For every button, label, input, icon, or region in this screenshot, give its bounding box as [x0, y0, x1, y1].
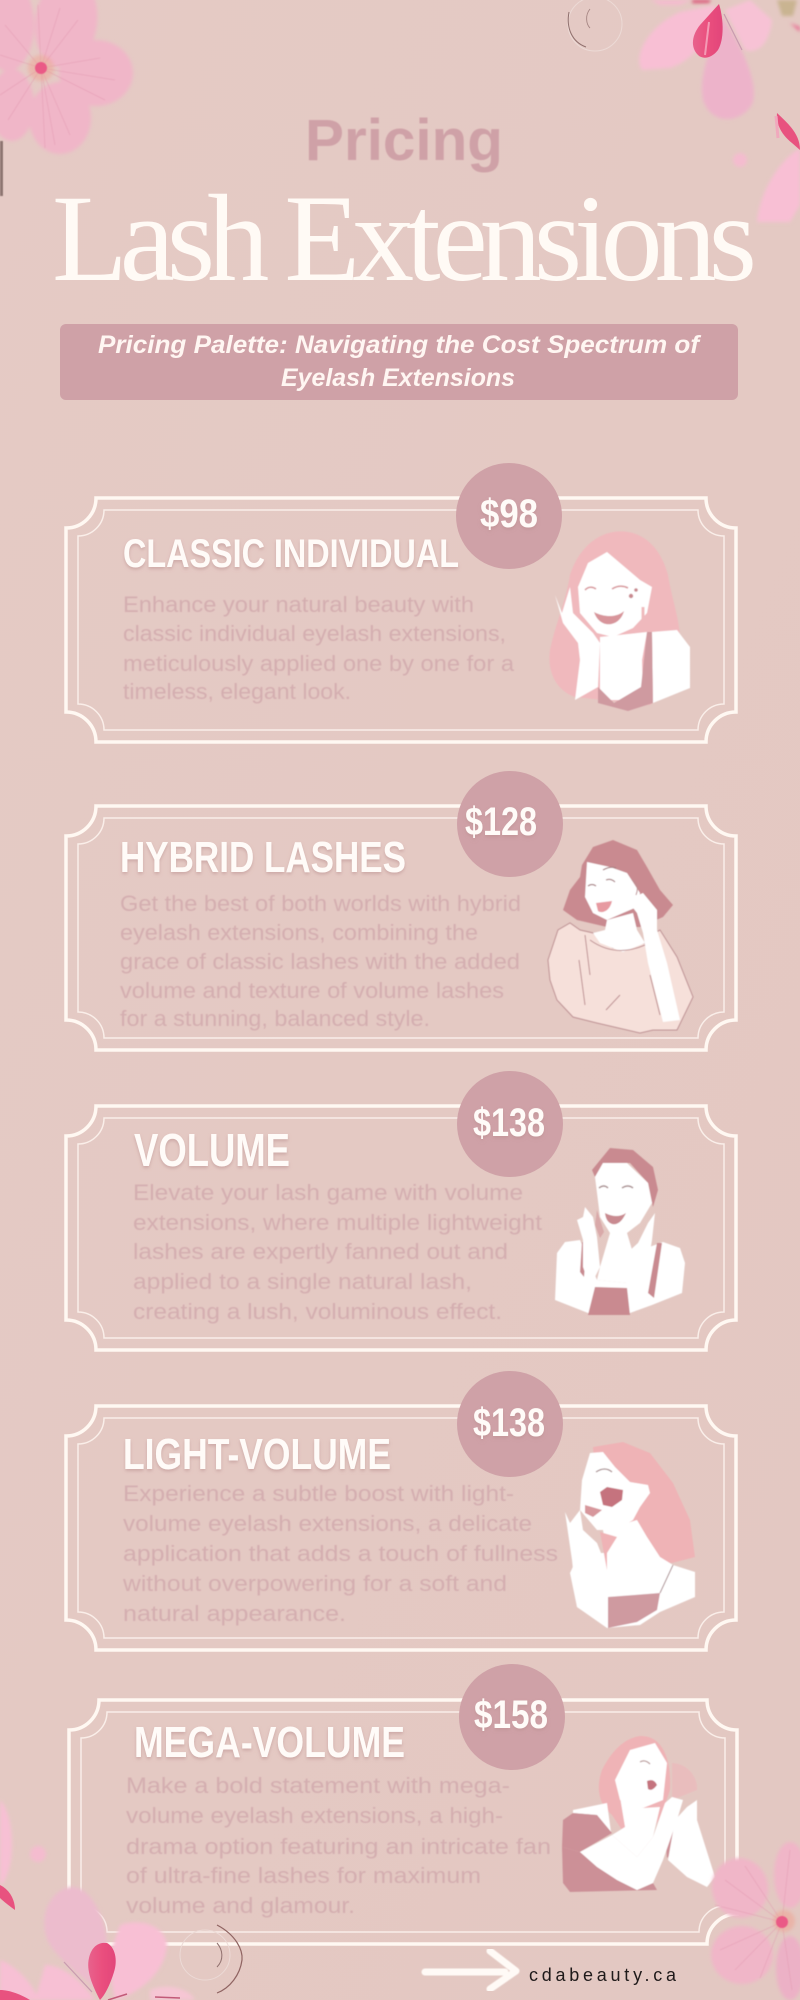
title: Lash Extensions: Lash Extensions: [52, 170, 757, 307]
panel: classic individual: [66, 463, 736, 742]
description: creating a lush, voluminous effect.: [133, 1299, 502, 1324]
price badge: [457, 771, 563, 877]
price badge: $98: [480, 492, 538, 536]
decorative sliver at left edge: [0, 141, 3, 196]
description: drama option featuring an intricate fan: [126, 1834, 551, 1859]
description: application that adds a touch of fullness: [123, 1541, 558, 1566]
banner text: Eyelash Extensions: [281, 364, 515, 392]
heading: HYBRID LASHES: [120, 833, 406, 882]
website link: cdabeauty.ca: [529, 1965, 677, 1985]
description: volume eyelash extensions, a high-: [126, 1803, 503, 1828]
description: of ultra-fine lashes for maximum: [126, 1863, 481, 1888]
heading: LIGHT-VOLUME: [123, 1430, 391, 1479]
card frame: [66, 806, 736, 1050]
panel: hybrid lashes: [66, 771, 736, 1050]
icon: woman touching face portrait: [555, 1148, 685, 1315]
description: grace of classic lashes with the added: [120, 949, 520, 974]
price badge: [457, 1071, 563, 1177]
description: timeless, elegant look.: [123, 679, 351, 704]
heading: CLASSIC INDIVIDUAL: [123, 532, 459, 576]
description: applied to a single natural lash,: [133, 1269, 472, 1294]
description: lashes are expertly fanned out and: [133, 1239, 508, 1264]
panel: volume: [66, 1071, 736, 1350]
icon: woman in blouse portrait: [548, 840, 693, 1033]
description: Get the best of both worlds with hybrid: [120, 891, 521, 916]
description: natural appearance.: [123, 1601, 346, 1626]
description: eyelash extensions, combining the: [120, 920, 478, 945]
price badge: [456, 463, 562, 569]
description: volume eyelash extensions, a delicate: [123, 1511, 532, 1536]
card frame: [66, 1106, 736, 1350]
card frame: [69, 1700, 737, 1944]
price badge: [459, 1664, 565, 1770]
price badge: [457, 1371, 563, 1477]
description: for a stunning, balanced style.: [120, 1006, 430, 1031]
price badge: $138: [473, 1401, 545, 1445]
price badge: $158: [474, 1693, 548, 1737]
price badge: $138: [473, 1101, 545, 1145]
description: volume and texture of volume lashes: [120, 978, 504, 1003]
card frame: [66, 498, 736, 742]
heading: Pricing: Pricing: [305, 108, 503, 173]
icon: woman smiling portrait: [549, 531, 690, 711]
description: volume and glamour.: [126, 1893, 355, 1918]
icon: bottom-left flower: [0, 1800, 242, 2000]
icon: top-left flower: [0, 0, 133, 154]
description: Experience a subtle boost with light-: [123, 1481, 514, 1506]
icon: woman with eye patch portrait: [565, 1442, 695, 1628]
description: without overpowering for a soft and: [122, 1571, 507, 1596]
icon: bottom-right flower: [705, 1842, 800, 2000]
arrow: [425, 1951, 516, 1989]
panel: mega-volume: [69, 1664, 737, 1944]
description: meticulously applied one by one for a: [123, 651, 515, 676]
description: extensions, where multiple lightweight: [133, 1210, 542, 1235]
banner: subtitle: [60, 324, 738, 400]
card frame: [66, 1406, 736, 1650]
panel: light-volume: [66, 1371, 736, 1650]
heading: VOLUME: [134, 1124, 290, 1176]
icon: woman applying lashes portrait: [562, 1736, 715, 1892]
banner text: Pricing Palette: Navigating the Cost Spectrum of: [98, 331, 702, 359]
price badge: $128: [465, 800, 537, 844]
description: Elevate your lash game with volume: [133, 1180, 523, 1205]
description: Make a bold statement with mega-: [126, 1773, 510, 1798]
description: Enhance your natural beauty with: [123, 592, 474, 617]
icon: top-right flower: [568, 0, 800, 222]
heading: MEGA-VOLUME: [134, 1718, 405, 1767]
description: classic individual eyelash extensions,: [123, 621, 506, 646]
